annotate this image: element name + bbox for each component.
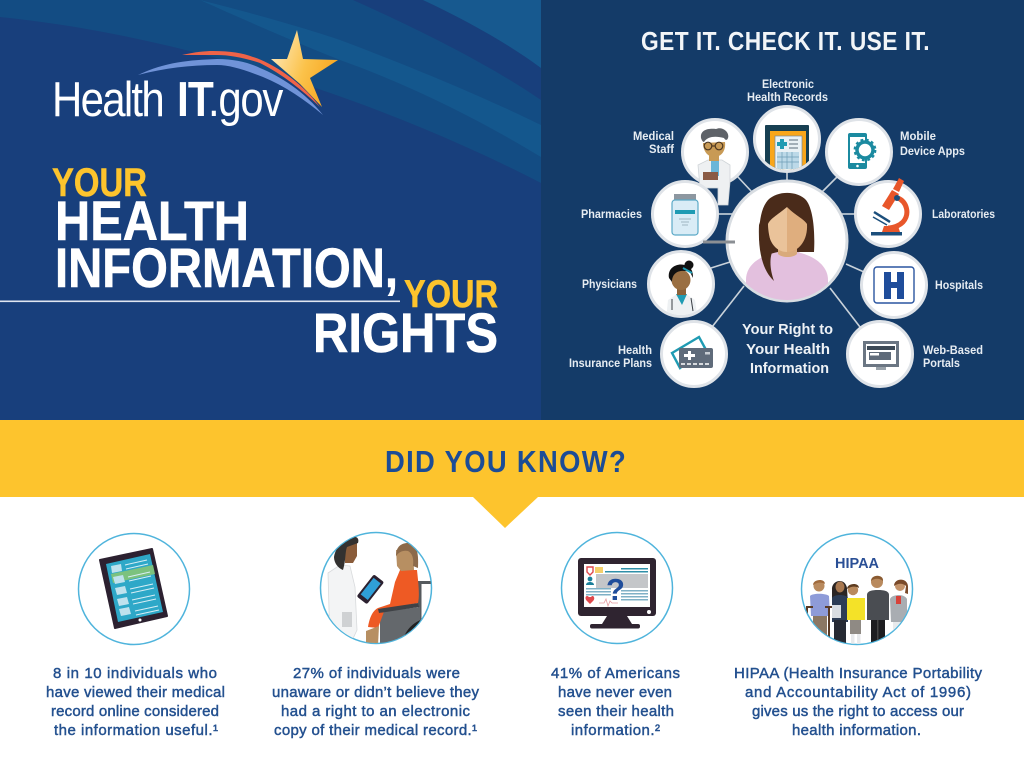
icon: laboratories [856,178,920,246]
banner: did you know [0,420,1024,528]
icon: electronic health records [754,106,820,173]
label: pharmacies: Pharmacies [581,207,642,221]
panel: title background [0,0,541,420]
icon: monitor with question mark: ? [606,572,625,607]
label: your right to your health information: Your Right to [742,322,833,338]
label: web-based portals: Web-Based [923,343,983,357]
label: hospitals: Hospitals [935,278,983,292]
logo: HealthIT.gov: Health [52,73,163,127]
label: your right to your health information: Your Health [746,342,830,358]
icon: HIPAA people: HIPAA [835,556,880,572]
label: mobile device apps: Device Apps [900,144,965,158]
label: health insurance plans: Insurance Plans [569,356,652,370]
text: stat 1: the information useful.¹ [54,722,218,739]
label: laboratories: Laboratories [932,207,995,221]
text: stat 3: information.² [571,722,660,739]
icon: doctor and patient [320,532,432,650]
title: Your Health Information, Your Rights: HEALTH [55,189,249,252]
panel: get it check it use it [541,0,1024,420]
title: Your Health Information, Your Rights: RIGHTS [313,301,498,364]
icon: medical staff [682,120,748,205]
label: web-based portals: Portals [923,356,960,370]
text: stat 2: 27% of individuals were [293,665,460,682]
label: physicians: Physicians [582,277,637,291]
text: stat 1: 8 in 10 individuals who [53,665,217,682]
stat 3: never seen information [551,532,680,739]
title: Your Health Information, Your Rights [0,161,498,364]
icon: monitor with question mark [562,532,672,644]
text: stat 3: 41% of Americans [551,665,680,682]
stat 2: unaware of right [272,532,480,739]
text: stat 1 [46,665,225,739]
text: stat 3: seen their health [558,703,674,720]
title: Your Health Information, Your Rights: YOUR [404,273,498,316]
text: stat 2: had a right to an electronic [281,703,470,720]
label: web-based portals [923,343,983,370]
icon: mobile device apps [826,120,892,184]
stat 4: HIPAA [734,534,982,739]
text: stat 4: gives us the right to access our [752,703,964,720]
text: stat 4 [734,665,982,739]
logo: HealthIT.gov: IT [177,73,214,127]
text: stat 2: unaware or didn’t believe they [272,684,480,701]
text: stat 2: copy of their medical record.¹ [274,722,477,739]
text: stat 1: have viewed their medical [46,684,225,701]
title: Your Health Information, Your Rights: INFORMATION, [55,236,398,299]
heading: get it check it use it: GET IT. CHECK IT. USE IT. [641,26,930,56]
stat 1: viewed record online [46,534,225,739]
connector lines [711,170,864,327]
label: medical staff [633,129,675,156]
label: your right to your health information [742,322,833,377]
logo: HealthIT.gov [52,30,338,127]
text: stat 3 [551,665,680,739]
text: stat 2 [272,665,480,739]
text: stat 3: have never even [558,684,672,701]
label: mobile device apps: Mobile [900,129,936,143]
icon: hospitals [862,252,926,318]
icon: tablet [78,534,190,644]
text: stat 1: record online considered [51,703,219,720]
center person circle [727,181,847,305]
label: electronic health records: Health Records [747,90,828,104]
label: your right to your health information: Information [750,361,829,377]
label: medical staff: Medical [633,129,674,143]
label: electronic health records [747,77,828,104]
icon: pharmacies [652,182,718,246]
icon: health insurance plans [662,322,726,386]
icon: HIPAA people [802,534,912,652]
label: health insurance plans: Health [618,343,652,357]
grey artifact bar [703,240,735,244]
label: mobile device apps [900,129,965,158]
icon: web-based portals [848,322,912,386]
text: stat 4: health information. [792,722,921,739]
heading: did you know: DID YOU KNOW? [385,444,627,479]
text: stat 4: and Accountability Act of 1996) [745,684,971,701]
logo: HealthIT.gov: .gov [208,73,284,127]
label: electronic health records: Electronic [762,77,814,91]
label: medical staff: Staff [649,142,675,156]
icon: physicians [648,252,714,320]
label: health insurance plans [569,343,652,370]
title: Your Health Information, Your Rights: YOUR [52,161,147,205]
text: stat 4: HIPAA (Health Insurance Portability [734,665,982,682]
